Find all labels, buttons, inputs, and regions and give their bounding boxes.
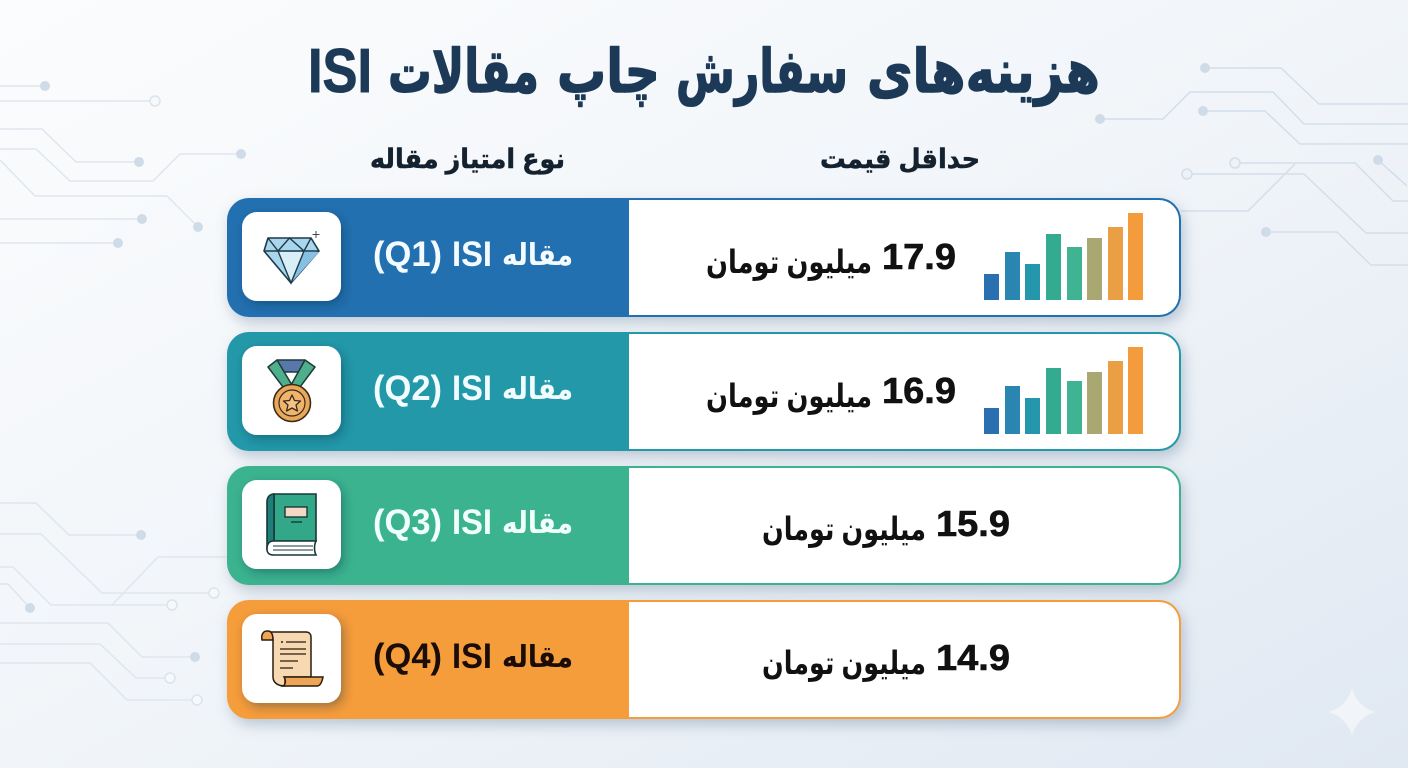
label Q1: (Q1) — [373, 235, 442, 274]
price Q4 — [762, 637, 1010, 682]
row card Q2 — [227, 332, 1181, 451]
icon tile: medal — [242, 346, 341, 435]
bar chart Q1 — [984, 213, 1143, 300]
label Q4 — [373, 637, 573, 676]
label Q4: مقاله — [502, 641, 573, 674]
icon tile: book — [242, 480, 341, 569]
label Q2: مقاله — [502, 373, 573, 406]
row card Q3 — [227, 466, 1181, 585]
title: ISI — [308, 37, 372, 106]
label Q3: (Q3) — [373, 503, 442, 542]
row: Q1 — [227, 198, 1181, 317]
row card Q4 — [227, 600, 1181, 719]
watermark sparkle — [1328, 688, 1376, 736]
price Q1: میلیون تومان — [706, 244, 872, 281]
circuit pattern: bottom left — [0, 503, 228, 705]
column heading: minimum price: حداقل قیمت — [820, 144, 980, 174]
label Q2 — [373, 369, 573, 408]
label Q2: ISI — [452, 369, 492, 408]
price Q1: 17.9 — [882, 236, 956, 277]
price Q3 — [762, 503, 1010, 548]
label Q4: ISI — [452, 637, 492, 676]
price Q4: میلیون تومان — [762, 645, 926, 682]
price Q3: 15.9 — [936, 503, 1010, 544]
label Q3: ISI — [452, 503, 492, 542]
title — [308, 37, 1100, 107]
row: Q2 — [227, 332, 1181, 451]
icon tile: diamond — [242, 212, 341, 301]
title: چاپ — [557, 38, 660, 107]
price Q2: میلیون تومان — [706, 378, 872, 415]
column heading: article type: نوع امتیاز مقاله — [370, 144, 565, 175]
price Q1 — [706, 236, 956, 281]
row: Q4 — [227, 600, 1181, 719]
price Q4: 14.9 — [936, 637, 1010, 678]
bar chart Q2 — [984, 347, 1143, 434]
circuit pattern: top left — [0, 81, 246, 248]
label Q1: مقاله — [502, 239, 573, 272]
icon tile: scroll — [242, 614, 341, 703]
price Q2: 16.9 — [882, 370, 956, 411]
title: مقالات — [388, 38, 539, 105]
label Q2: (Q2) — [373, 369, 442, 408]
price Q3: میلیون تومان — [762, 511, 926, 548]
label Q1 — [373, 235, 573, 274]
label Q4: (Q4) — [373, 637, 442, 676]
row: Q3 — [227, 466, 1181, 585]
title: سفارش — [676, 38, 848, 107]
row card Q1 — [227, 198, 1181, 317]
title: هزینه‌های — [867, 38, 1100, 107]
label Q3: مقاله — [502, 507, 573, 540]
circuit pattern: top right — [1095, 63, 1408, 265]
label Q1: ISI — [452, 235, 492, 274]
price Q2 — [706, 370, 956, 415]
label Q3 — [373, 503, 573, 542]
